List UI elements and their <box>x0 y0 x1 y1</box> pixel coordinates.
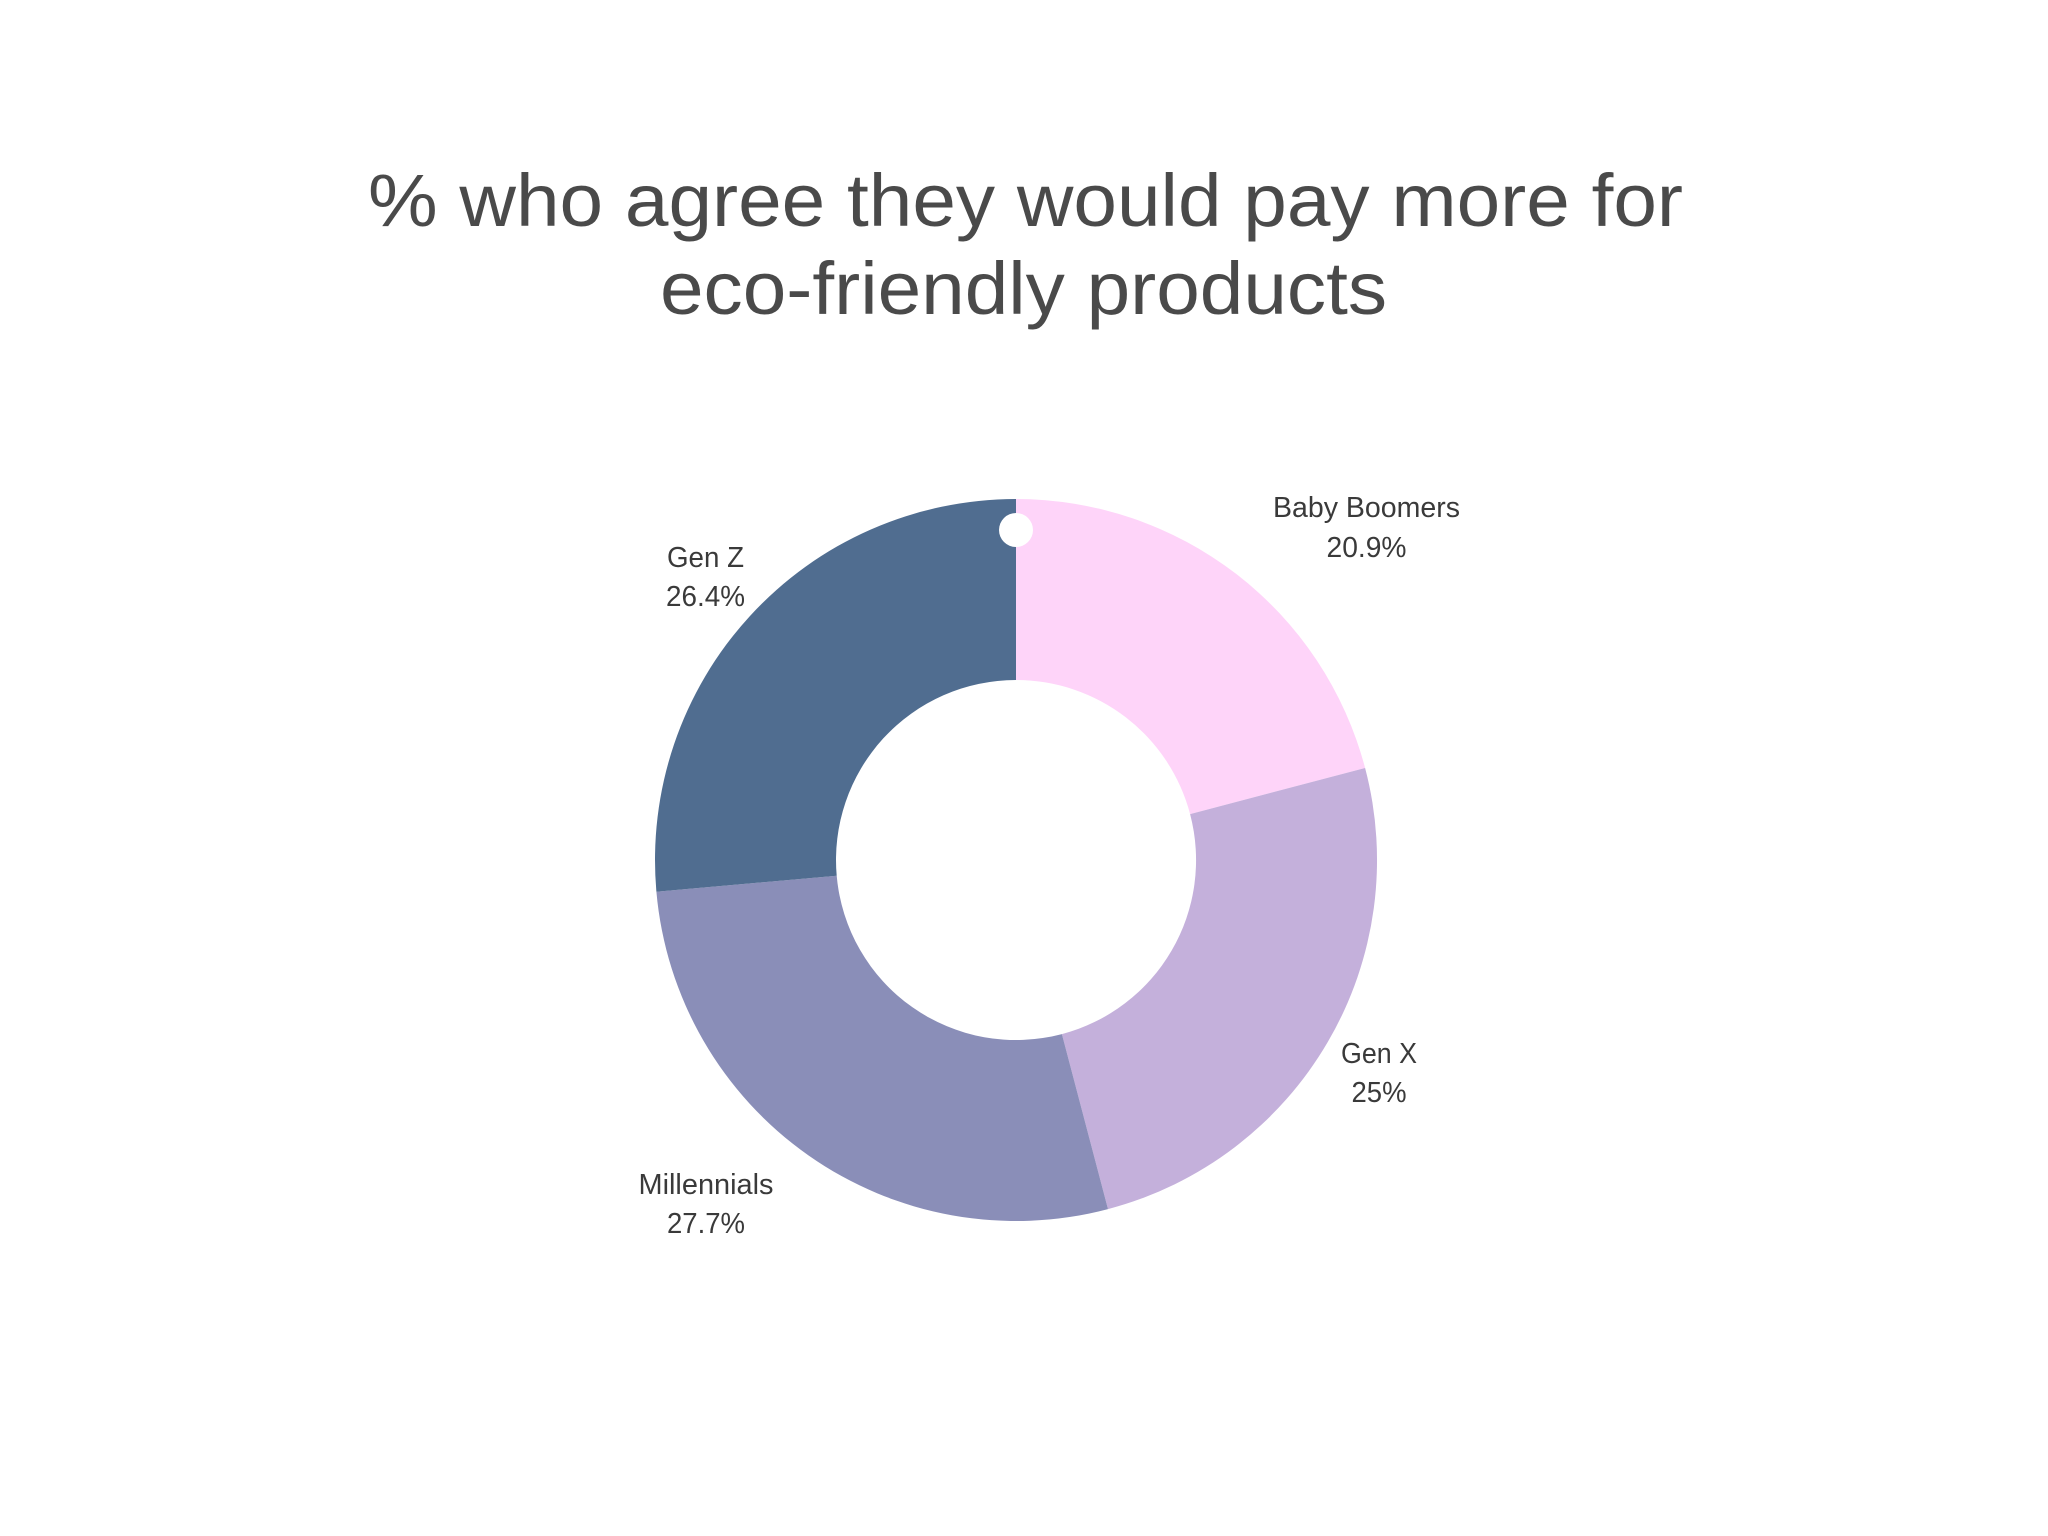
title <box>368 159 1683 330</box>
label: Gen X: 25% <box>1352 1077 1406 1109</box>
label: Gen X: Gen X <box>1341 1038 1417 1070</box>
segment: Baby Boomers 20.9% <box>1016 499 1365 814</box>
title: % who agree they would pay more for <box>368 159 1683 242</box>
label: Gen X <box>1341 1038 1417 1109</box>
label: Millennials: Millennials <box>638 1169 774 1201</box>
donut chart <box>655 499 1377 1221</box>
label: Baby Boomers <box>1273 492 1460 564</box>
segment: Millennials 27.7% <box>656 876 1108 1221</box>
segment: Gen Z 26.4% <box>655 499 1016 892</box>
label: Baby Boomers: 20.9% <box>1326 532 1406 564</box>
segment: Gen X 25% <box>1062 768 1377 1209</box>
white marker dot <box>999 513 1033 547</box>
label: Gen Z <box>666 542 745 613</box>
title: eco-friendly products <box>660 247 1387 330</box>
label: Gen Z: 26.4% <box>666 581 745 613</box>
label: Millennials: 27.7% <box>667 1208 745 1240</box>
label: Millennials <box>638 1169 774 1240</box>
label: Baby Boomers: Baby Boomers <box>1273 492 1460 524</box>
label: Gen Z: Gen Z <box>667 542 744 574</box>
